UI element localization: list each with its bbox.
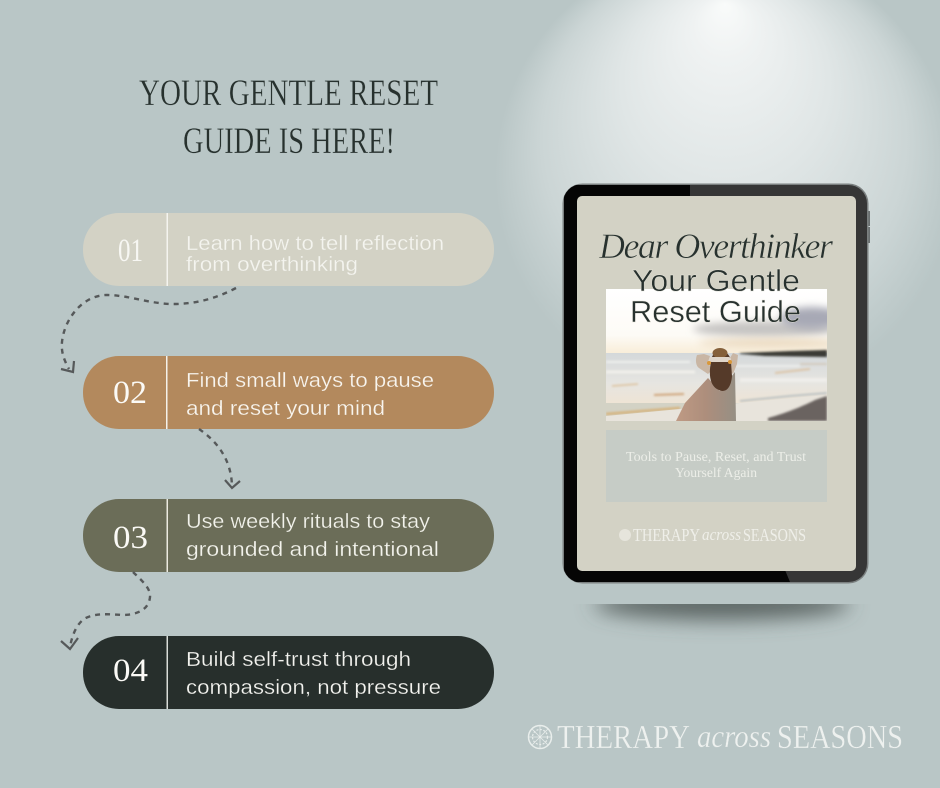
woman — [676, 348, 738, 421]
brand wordmark: THERAPY — [557, 719, 690, 756]
step 2 pill — [83, 356, 494, 429]
arrow: step 2 to step 3 — [199, 429, 240, 488]
beach — [606, 402, 827, 421]
step 1 text — [186, 232, 444, 276]
step 1 text: Learn how to tell reflection — [186, 232, 444, 255]
step 1 number: 01 — [118, 233, 143, 269]
step 1 pill — [83, 213, 494, 286]
step 2 text: and reset your mind — [186, 397, 385, 420]
arrow: step 1 to step 2 — [61, 288, 236, 372]
brand logo — [528, 718, 903, 756]
wet sand — [768, 396, 827, 421]
tablet shadow — [594, 588, 850, 620]
step 3 text: grounded and intentional — [186, 538, 439, 561]
clouds — [693, 321, 837, 337]
cover brand logo: across — [702, 525, 741, 544]
step 4 pill — [83, 636, 494, 709]
cover script heading: Dear Overthinker — [598, 226, 834, 266]
waves — [606, 362, 827, 414]
brand wordmark: across — [697, 718, 771, 754]
cover subtitle box: Tools to Pause, Reset, and Trust — [626, 449, 806, 464]
cover title — [630, 263, 801, 329]
cover subtitle box — [606, 430, 827, 502]
icon: mandala — [528, 726, 552, 748]
side buttons — [867, 211, 870, 243]
far shoreline — [740, 350, 827, 357]
title: GUIDE IS HERE! — [183, 121, 395, 162]
cover brand logo: SEASONS — [743, 525, 806, 545]
cover brand logo: THERAPY — [633, 525, 700, 545]
step 4 text: compassion, not pressure — [186, 676, 441, 699]
step 4 text: Build self-trust through — [186, 648, 411, 671]
step 2 text — [186, 369, 434, 420]
cover brand logo — [619, 525, 806, 545]
cover title: Your Gentle — [632, 263, 800, 298]
title — [139, 73, 438, 162]
step 3 text: Use weekly rituals to stay — [186, 510, 431, 533]
cover photo — [606, 289, 844, 421]
step 3 number: 03 — [113, 520, 148, 556]
cover title: Reset Guide — [630, 294, 801, 329]
step 3 pill — [83, 499, 494, 572]
step 1 text: from overthinking — [186, 253, 358, 276]
step 4 text — [186, 648, 441, 699]
step 2 text: Find small ways to pause — [186, 369, 434, 392]
cover subtitle box: Yourself Again — [675, 465, 757, 480]
title: YOUR GENTLE RESET — [139, 73, 438, 114]
step 2 number: 02 — [113, 375, 147, 411]
spotlight glow — [495, 0, 940, 405]
tablet mockup — [562, 184, 870, 584]
brand wordmark: SEASONS — [777, 719, 903, 756]
brand wordmark — [557, 718, 903, 756]
arrow: step 3 to step 4 — [61, 572, 150, 649]
step 4 number: 04 — [113, 653, 148, 689]
tablet screen — [577, 196, 856, 571]
tablet bezel — [562, 184, 868, 584]
step 3 text — [186, 510, 439, 561]
